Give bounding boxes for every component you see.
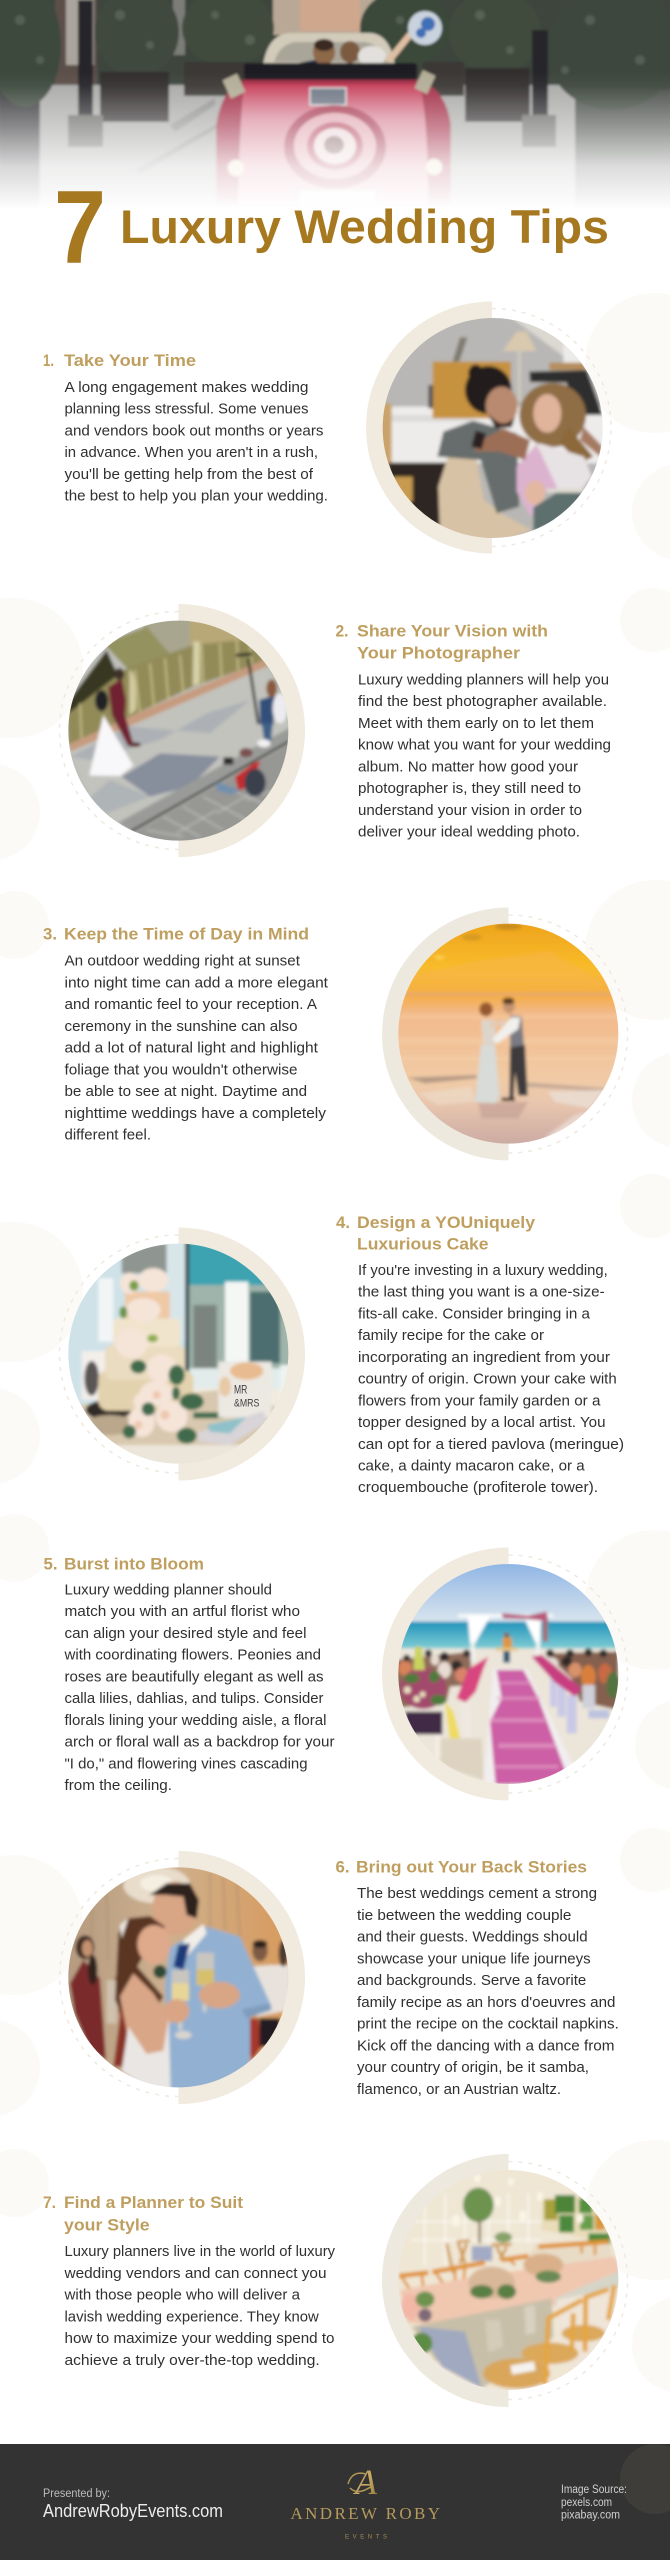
- title: Luxury Wedding Tips: [120, 200, 609, 253]
- body text: tip 1: in advance. When you aren't in a rush,: [64, 445, 318, 461]
- body text: tip 3: An outdoor wedding right at sunset: [64, 954, 300, 970]
- logo: Andrew Roby Events: A: [353, 2462, 378, 2502]
- heading: tip 3: 3.: [43, 925, 57, 944]
- body text: tip 6: flamenco, or an Austrian waltz.: [357, 2082, 561, 2098]
- image source: pexels.com: [561, 2497, 612, 2509]
- body text: tip 1: planning less stressful. Some venues: [64, 402, 308, 418]
- body text: tip 4: cake, a dainty macaron cake, or a: [358, 1458, 586, 1474]
- body text: tip 2: know what you want for your wedding: [358, 738, 611, 754]
- panel: tip 6: [60, 1851, 619, 2104]
- body text: tip 5: can align your desired style and feel: [64, 1626, 306, 1642]
- body text: tip 4: country of origin. Crown your cake with: [358, 1372, 617, 1388]
- footer bar: [0, 2444, 670, 2560]
- body text: tip 6: showcase your unique life journeys: [357, 1951, 591, 1967]
- body text: tip 3: be able to see at night. Daytime and: [64, 1084, 307, 1100]
- heading: tip 2: Share Your Vision with: [357, 622, 548, 640]
- heading: tip 7: 7.: [43, 2193, 56, 2212]
- logo: Andrew Roby Events: [290, 2462, 440, 2540]
- image source: [561, 2484, 627, 2522]
- panel: tip 5: [44, 1548, 628, 1800]
- photo circle: couple on beach at sunset: [382, 908, 628, 1160]
- body text: tip 3: ceremony in the sunshine can also: [64, 1019, 298, 1035]
- body text: tip 6: tie between the wedding couple: [357, 1908, 571, 1924]
- heading: tip 4: 4.: [336, 1213, 350, 1232]
- body text: tip 6: and their guests. Weddings should: [357, 1930, 588, 1946]
- heading: tip 4: [336, 1213, 536, 1254]
- heading: tip 7: your Style: [64, 2216, 150, 2234]
- heading: tip 7: [43, 2193, 243, 2234]
- body text: tip 2: find the best photographer available.: [358, 694, 607, 710]
- body text: tip 5: Luxury wedding planner should: [64, 1582, 272, 1598]
- photo circle: beach ceremony: [382, 1548, 628, 1800]
- image source: Image Source:: [561, 2484, 627, 2496]
- heading: tip 6: Bring out Your Back Stories: [356, 1858, 587, 1876]
- body text: tip 4: [358, 1263, 624, 1496]
- panel: tip 1: [43, 302, 611, 554]
- body text: tip 4: flowers from your family garden or a: [358, 1393, 601, 1409]
- heading: tip 4: Design a YOUniquely: [357, 1213, 536, 1232]
- heading: tip 2: [336, 622, 548, 663]
- photo circle: wedding cake: [60, 1228, 305, 1480]
- body text: tip 5: [63, 1582, 335, 1794]
- body text: tip 7: achieve a truly over-the-top wedding.: [64, 2353, 320, 2369]
- body text: tip 1: you'll be getting help from the best of: [64, 467, 314, 483]
- heading: tip 5: 5.: [44, 1554, 58, 1573]
- body text: tip 4: If you're investing in a luxury wedding,: [358, 1263, 608, 1279]
- body text: tip 3: into night time can add a more elegant: [64, 976, 328, 992]
- body text: tip 5: with coordinating flowers. Peonies and: [63, 1648, 321, 1664]
- body text: tip 7: [63, 2244, 336, 2369]
- body text: tip 3: nighttime weddings have a completely: [64, 1106, 327, 1122]
- body text: tip 1: [64, 380, 328, 505]
- image source: pixabay.com: [561, 2510, 620, 2522]
- logo: Andrew Roby Events: ANDREW ROBY: [290, 2504, 440, 2523]
- body text: tip 5: match you with an artful florist who: [64, 1604, 300, 1620]
- body text: tip 5: florals lining your wedding aisle, a floral: [64, 1713, 326, 1729]
- body text: tip 5: calla lilies, dahlias, and tulips. Consider: [64, 1691, 324, 1707]
- body text: tip 5: "I do," and flowering vines cascading: [64, 1756, 308, 1772]
- header photo: wedding car: [0, 0, 670, 228]
- body text: tip 2: photographer is, they still need to: [358, 781, 581, 797]
- title: [54, 170, 609, 286]
- panel: tip 7: [43, 2154, 628, 2407]
- heading: tip 6: 6.: [336, 1858, 350, 1876]
- body text: tip 6: The best weddings cement a strong: [357, 1886, 597, 1902]
- body text: tip 1: and vendors book out months or years: [64, 424, 324, 440]
- body text: tip 4: fits-all cake. Consider bringing in a: [358, 1306, 591, 1322]
- body text: tip 7: Luxury planners live in the world of luxury: [64, 2244, 336, 2260]
- body text: tip 1: the best to help you plan your wedding.: [64, 489, 328, 505]
- body text: tip 7: lavish wedding experience. They know: [64, 2309, 319, 2325]
- photo circle: photographer and couple: [60, 604, 305, 857]
- body text: tip 3: add a lot of natural light and highlight: [64, 1041, 318, 1057]
- body text: tip 6: print the recipe on the cocktail napkins.: [357, 2017, 619, 2033]
- heading: tip 2: 2.: [336, 622, 348, 640]
- body text: tip 4: can opt for a tiered pavlova (meringue): [358, 1437, 624, 1453]
- heading: tip 4: Luxurious Cake: [357, 1234, 488, 1254]
- body text: tip 6: and backgrounds. Serve a favorite: [357, 1973, 586, 1989]
- body text: tip 5: arch or floral wall as a backdrop for your: [64, 1735, 335, 1751]
- body text: tip 5: roses are beautifully elegant as well as: [64, 1669, 324, 1685]
- body text: tip 6: Kick off the dancing with a dance from: [357, 2038, 614, 2054]
- heading: tip 2: Your Photographer: [357, 644, 520, 663]
- heading: tip 1: Take Your Time: [64, 351, 196, 370]
- body text: tip 2: album. No matter how good your: [358, 759, 578, 775]
- heading: tip 1: 1.: [43, 351, 54, 370]
- panel: tip 3: [43, 908, 628, 1160]
- body text: tip 6: [357, 1886, 619, 2098]
- presented by: AndrewRobyEvents.com: [43, 2501, 223, 2521]
- heading: tip 3: Keep the Time of Day in Mind: [64, 925, 309, 944]
- body text: tip 2: [358, 672, 611, 841]
- body text: tip 3: [64, 954, 328, 1144]
- heading: tip 5: Burst into Bloom: [64, 1554, 204, 1573]
- body text: tip 6: family recipe as an hors d'oeuvres and: [357, 1995, 615, 2011]
- title: 7: [54, 170, 106, 286]
- body text: tip 2: deliver your ideal wedding photo.: [358, 825, 580, 841]
- presented by: [43, 2488, 223, 2521]
- photo circle: couple toasting: [60, 1851, 305, 2104]
- body text: tip 4: incorporating an ingredient from your: [358, 1350, 610, 1366]
- body text: tip 3: and romantic feel to your reception. A: [64, 997, 317, 1013]
- body text: tip 2: understand your vision in order to: [358, 803, 582, 819]
- body text: tip 5: from the ceiling.: [64, 1778, 172, 1794]
- body text: tip 3: foliage that you wouldn't otherwise: [64, 1062, 298, 1078]
- body text: tip 4: topper designed by a local artist. You: [358, 1415, 606, 1431]
- body text: tip 7: with those people who will deliver a: [63, 2288, 301, 2304]
- body text: tip 6: your country of origin, be it samba,: [357, 2060, 589, 2076]
- body text: tip 3: different feel.: [64, 1128, 151, 1144]
- heading: tip 7: Find a Planner to Suit: [64, 2193, 243, 2212]
- logo: Andrew Roby Events: EVENTS: [345, 2534, 387, 2540]
- body text: tip 4: the last thing you want is a one-size-: [358, 1285, 605, 1301]
- body text: tip 2: Meet with them early on to let them: [358, 716, 594, 732]
- photo circle: wedding cake: &MRS: [234, 1398, 260, 1410]
- body text: tip 7: wedding vendors and can connect you: [63, 2266, 326, 2282]
- photo circle: reception tables: [382, 2154, 628, 2407]
- photo circle: wedding cake: MR: [234, 1382, 248, 1396]
- body text: tip 2: Luxury wedding planners will help you: [358, 672, 609, 688]
- panel: tip 4: [60, 1213, 624, 1496]
- body text: tip 4: family recipe for the cake or: [358, 1328, 544, 1344]
- presented by: Presented by:: [43, 2488, 110, 2500]
- panel: tip 2: [60, 604, 611, 857]
- body text: tip 7: how to maximize your wedding spend to: [64, 2331, 334, 2347]
- body text: tip 4: croquembouche (profiterole tower).: [358, 1480, 598, 1496]
- body text: tip 1: A long engagement makes wedding: [64, 380, 308, 396]
- photo circle: couple with laptop: [366, 302, 611, 554]
